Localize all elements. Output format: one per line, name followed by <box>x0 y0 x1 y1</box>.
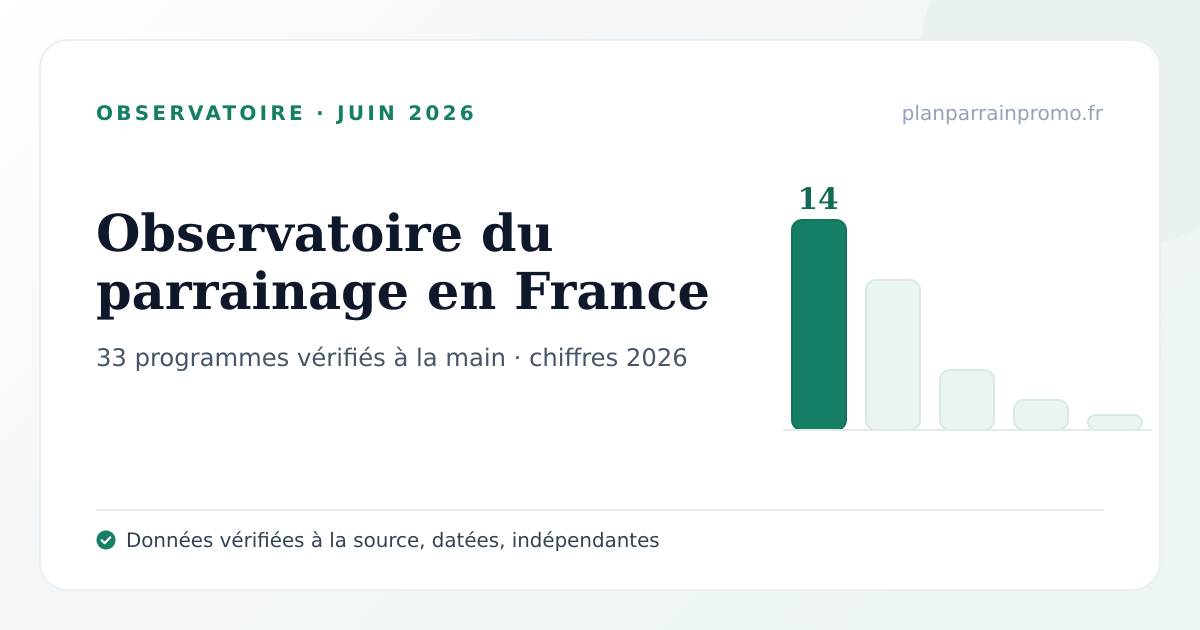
footer text: Données vérifiées à la source, datées, indépendantes <box>126 529 660 552</box>
decorative background circle <box>921 0 1200 249</box>
subtitle: 33 programmes vérifiés à la main · chiffres 2026 <box>96 343 688 372</box>
value label: 14: 14 <box>797 181 839 216</box>
bar 4 <box>1013 399 1069 431</box>
icon: check badge <box>96 530 116 550</box>
eyebrow heading: OBSERVATOIRE · JUIN 2026 <box>96 101 477 125</box>
chart baseline <box>783 429 1152 431</box>
footer divider <box>96 509 1104 511</box>
title: parrainage en France <box>96 262 710 322</box>
title <box>96 204 710 322</box>
bar 3 <box>939 369 995 431</box>
footer note <box>96 529 660 552</box>
bar 2 <box>865 279 921 431</box>
bar 5 <box>1087 414 1143 431</box>
bar chart <box>783 181 1152 431</box>
title: Observatoire du <box>96 204 554 264</box>
bar 1 <box>791 219 847 431</box>
site name: planparrainpromo.fr <box>902 101 1103 125</box>
